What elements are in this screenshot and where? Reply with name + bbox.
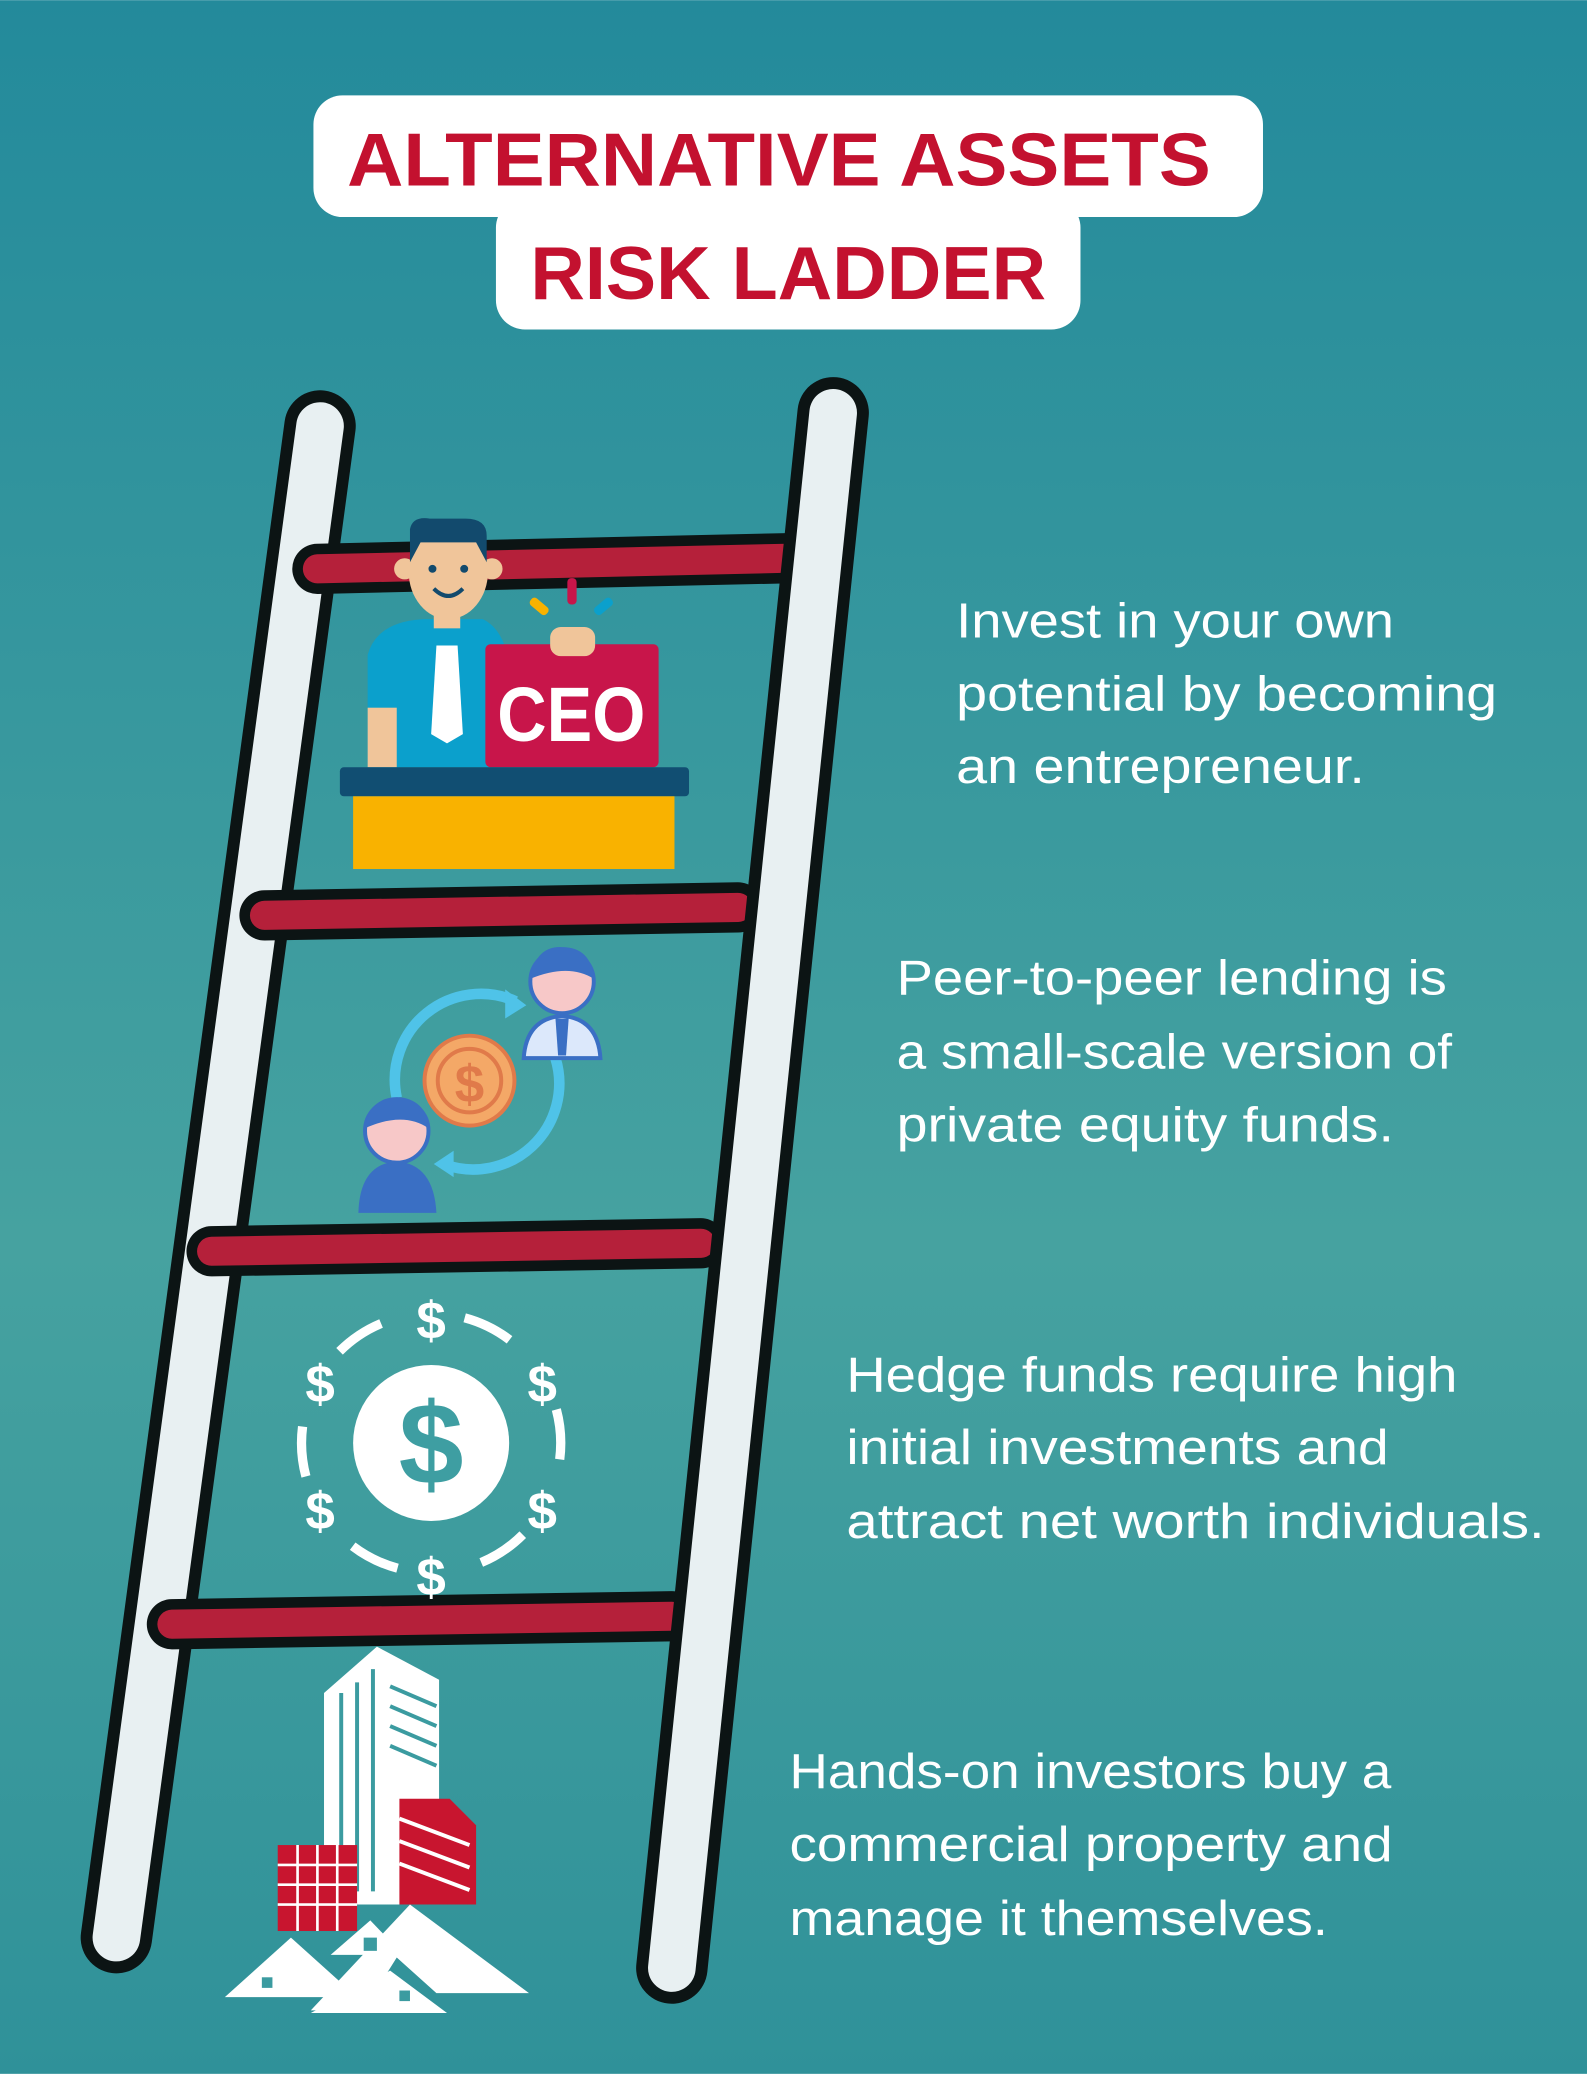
text: entrepreneur bbox=[956, 595, 1497, 794]
text: commercial property bbox=[790, 1745, 1393, 1946]
title: RISK LADDER bbox=[530, 231, 1046, 315]
icon: dollar circle: $ bbox=[305, 1482, 335, 1541]
text: hedge funds: Hedge funds require high bbox=[846, 1348, 1457, 1402]
icon: dollar circle: $ bbox=[528, 1355, 557, 1414]
icon: dollar circle: $ bbox=[416, 1548, 446, 1607]
title bbox=[313, 95, 1263, 329]
text: commercial property: manage it themselves. bbox=[790, 1892, 1328, 1946]
ladder bbox=[116, 413, 833, 1968]
icon: dollar circle: $ bbox=[305, 1355, 335, 1414]
text: entrepreneur: an entrepreneur. bbox=[956, 740, 1365, 794]
icon: dollar circle: $ bbox=[399, 1379, 464, 1509]
text: hedge funds bbox=[846, 1348, 1545, 1549]
title: ALTERNATIVE ASSETS bbox=[347, 117, 1211, 201]
text: entrepreneur: potential by becoming bbox=[956, 667, 1497, 721]
icon: buildings bbox=[225, 1647, 529, 2013]
icon: peer-to-peer lending bbox=[358, 947, 600, 1213]
text: peer-to-peer: Peer-to-peer lending is bbox=[897, 952, 1447, 1006]
icon: CEO: CEO bbox=[497, 673, 645, 758]
icon: peer-to-peer lending: $ bbox=[455, 1055, 484, 1114]
icon: CEO bbox=[340, 518, 689, 869]
text: hedge funds: attract net worth individuals. bbox=[846, 1495, 1545, 1549]
icon: dollar circle bbox=[272, 1284, 590, 1607]
icon: dollar circle: $ bbox=[528, 1482, 557, 1541]
text: peer-to-peer: a small-scale version of bbox=[897, 1026, 1453, 1080]
text: entrepreneur: Invest in your own bbox=[956, 595, 1394, 649]
text: peer-to-peer: private equity funds. bbox=[897, 1098, 1394, 1152]
icon: dollar circle: $ bbox=[416, 1292, 446, 1351]
text: hedge funds: initial investments and bbox=[846, 1421, 1389, 1475]
text: peer-to-peer bbox=[897, 952, 1453, 1152]
text: commercial property: commercial property and bbox=[790, 1818, 1393, 1872]
text: commercial property: Hands-on investors buy a bbox=[790, 1745, 1392, 1799]
